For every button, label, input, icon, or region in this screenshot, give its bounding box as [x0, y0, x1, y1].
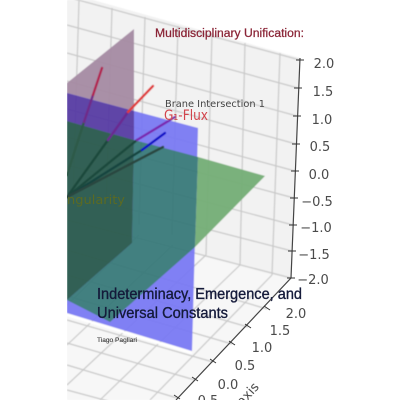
- label: singularity: ngularity: [67, 193, 125, 207]
- vector lines from origin: [67, 68, 175, 197]
- blue plane: [67, 93, 198, 351]
- translucent intersecting planes: [67, 29, 265, 351]
- vertical axis labels: −1.5: [298, 248, 330, 263]
- author: Tiago Pagliari: [97, 337, 137, 344]
- green plane tip: [195, 157, 265, 247]
- vertical axis labels: −2.0: [297, 273, 329, 288]
- label: flux: G₁-Flux: [164, 108, 208, 124]
- vertical axis labels: 1.0: [312, 113, 332, 128]
- mauve vertical plane: [67, 29, 134, 111]
- blue vector 4: [78, 149, 142, 190]
- gray vector 5: [67, 147, 163, 197]
- wall and floor grid: [67, 0, 300, 400]
- vertical axis labels: −0.5: [301, 195, 333, 210]
- main title: Universal Constants: [97, 305, 228, 322]
- vertical axis line: [174, 58, 304, 400]
- label: brane intersection: Brane Intersection 1: [165, 99, 265, 110]
- diagonal axis labels: 0.5: [235, 359, 255, 374]
- vertical axis labels: [297, 57, 334, 288]
- diagonal axis labels: 0.0: [218, 378, 238, 393]
- teal overlap of green and blue: [67, 140, 198, 322]
- heading: multidisciplinary unification: Multidisciplinary Unification:: [155, 28, 304, 40]
- vertical axis labels: −1.0: [300, 221, 332, 236]
- 3D plot floor: [68, 256, 288, 399]
- diagonal axis labels: 2.0: [286, 307, 306, 322]
- magenta vector 3: [72, 139, 138, 192]
- vertical axis labels: 2.0: [314, 57, 334, 72]
- purple overlap of mauve and blue: [67, 93, 134, 140]
- red vector 2: [67, 140, 108, 197]
- dark green overlap of all three planes: [67, 121, 134, 300]
- vertical axis labels: 0.0: [309, 168, 329, 183]
- red vector 1: [67, 122, 84, 175]
- main title: Indeterminacy, Emergence, and: [97, 286, 302, 303]
- vertical axis labels: 0.5: [310, 140, 330, 155]
- diagonal axis labels: 1.0: [252, 341, 272, 356]
- axis ticks: [174, 60, 304, 399]
- vertical axis labels: 1.5: [313, 85, 333, 100]
- 3D plot back wall: [67, 0, 300, 278]
- white edge under blue plane: [89, 320, 162, 344]
- diagonal axis labels: 1.5: [270, 324, 290, 339]
- diagonal axis labels: [198, 307, 306, 400]
- main title: [97, 286, 302, 322]
